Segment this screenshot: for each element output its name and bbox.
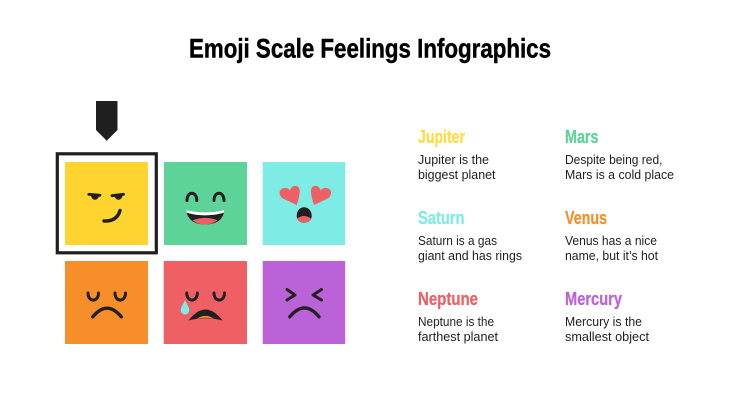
legend: Mercury: Mercury is the — [565, 315, 642, 329]
legend: Venus: name, but it’s hot — [565, 249, 659, 263]
legend: Neptune: Neptune is the — [418, 315, 494, 329]
legend: Venus — [565, 208, 659, 263]
legend: Jupiter: biggest planet — [418, 168, 496, 182]
selection frame — [57, 154, 156, 253]
emoji: cyan heart eyes — [263, 162, 345, 245]
legend: Neptune: farthest planet — [418, 330, 499, 344]
legend: Jupiter: Jupiter is the — [418, 153, 489, 167]
legend: Saturn: Saturn — [418, 208, 464, 228]
legend: Saturn: Saturn is a gas — [418, 234, 497, 248]
legend: Jupiter — [418, 127, 496, 182]
panel: emoji scale — [57, 101, 345, 344]
legend: Saturn: giant and has rings — [418, 249, 522, 263]
legend: Mars — [565, 127, 674, 182]
legend: Mercury — [565, 289, 650, 344]
legend: Mercury: Mercury — [565, 289, 622, 309]
legend: Neptune — [418, 289, 499, 344]
legend: Saturn — [418, 208, 522, 263]
legend: Jupiter: Jupiter — [418, 127, 465, 147]
icon: pointer arrow — [96, 101, 118, 141]
emoji: orange sad — [65, 261, 148, 344]
icon: tear — [181, 300, 189, 315]
emoji: red crying — [164, 261, 247, 344]
emoji: yellow smirk — [65, 162, 148, 245]
legend: Venus: Venus — [565, 208, 607, 228]
legend: Mercury: smallest object — [565, 330, 650, 344]
emoji: green laughing — [164, 162, 247, 245]
legend: Neptune: Neptune — [418, 289, 478, 309]
legend: Mars: Mars is a cold place — [565, 168, 674, 182]
legend: Mars: Mars — [565, 127, 598, 147]
emoji: purple squint — [263, 261, 345, 344]
title: Emoji Scale Feelings Infographics — [189, 34, 551, 64]
legend: Mars: Despite being red, — [565, 153, 662, 167]
legend: Venus: Venus has a nice — [565, 234, 657, 248]
